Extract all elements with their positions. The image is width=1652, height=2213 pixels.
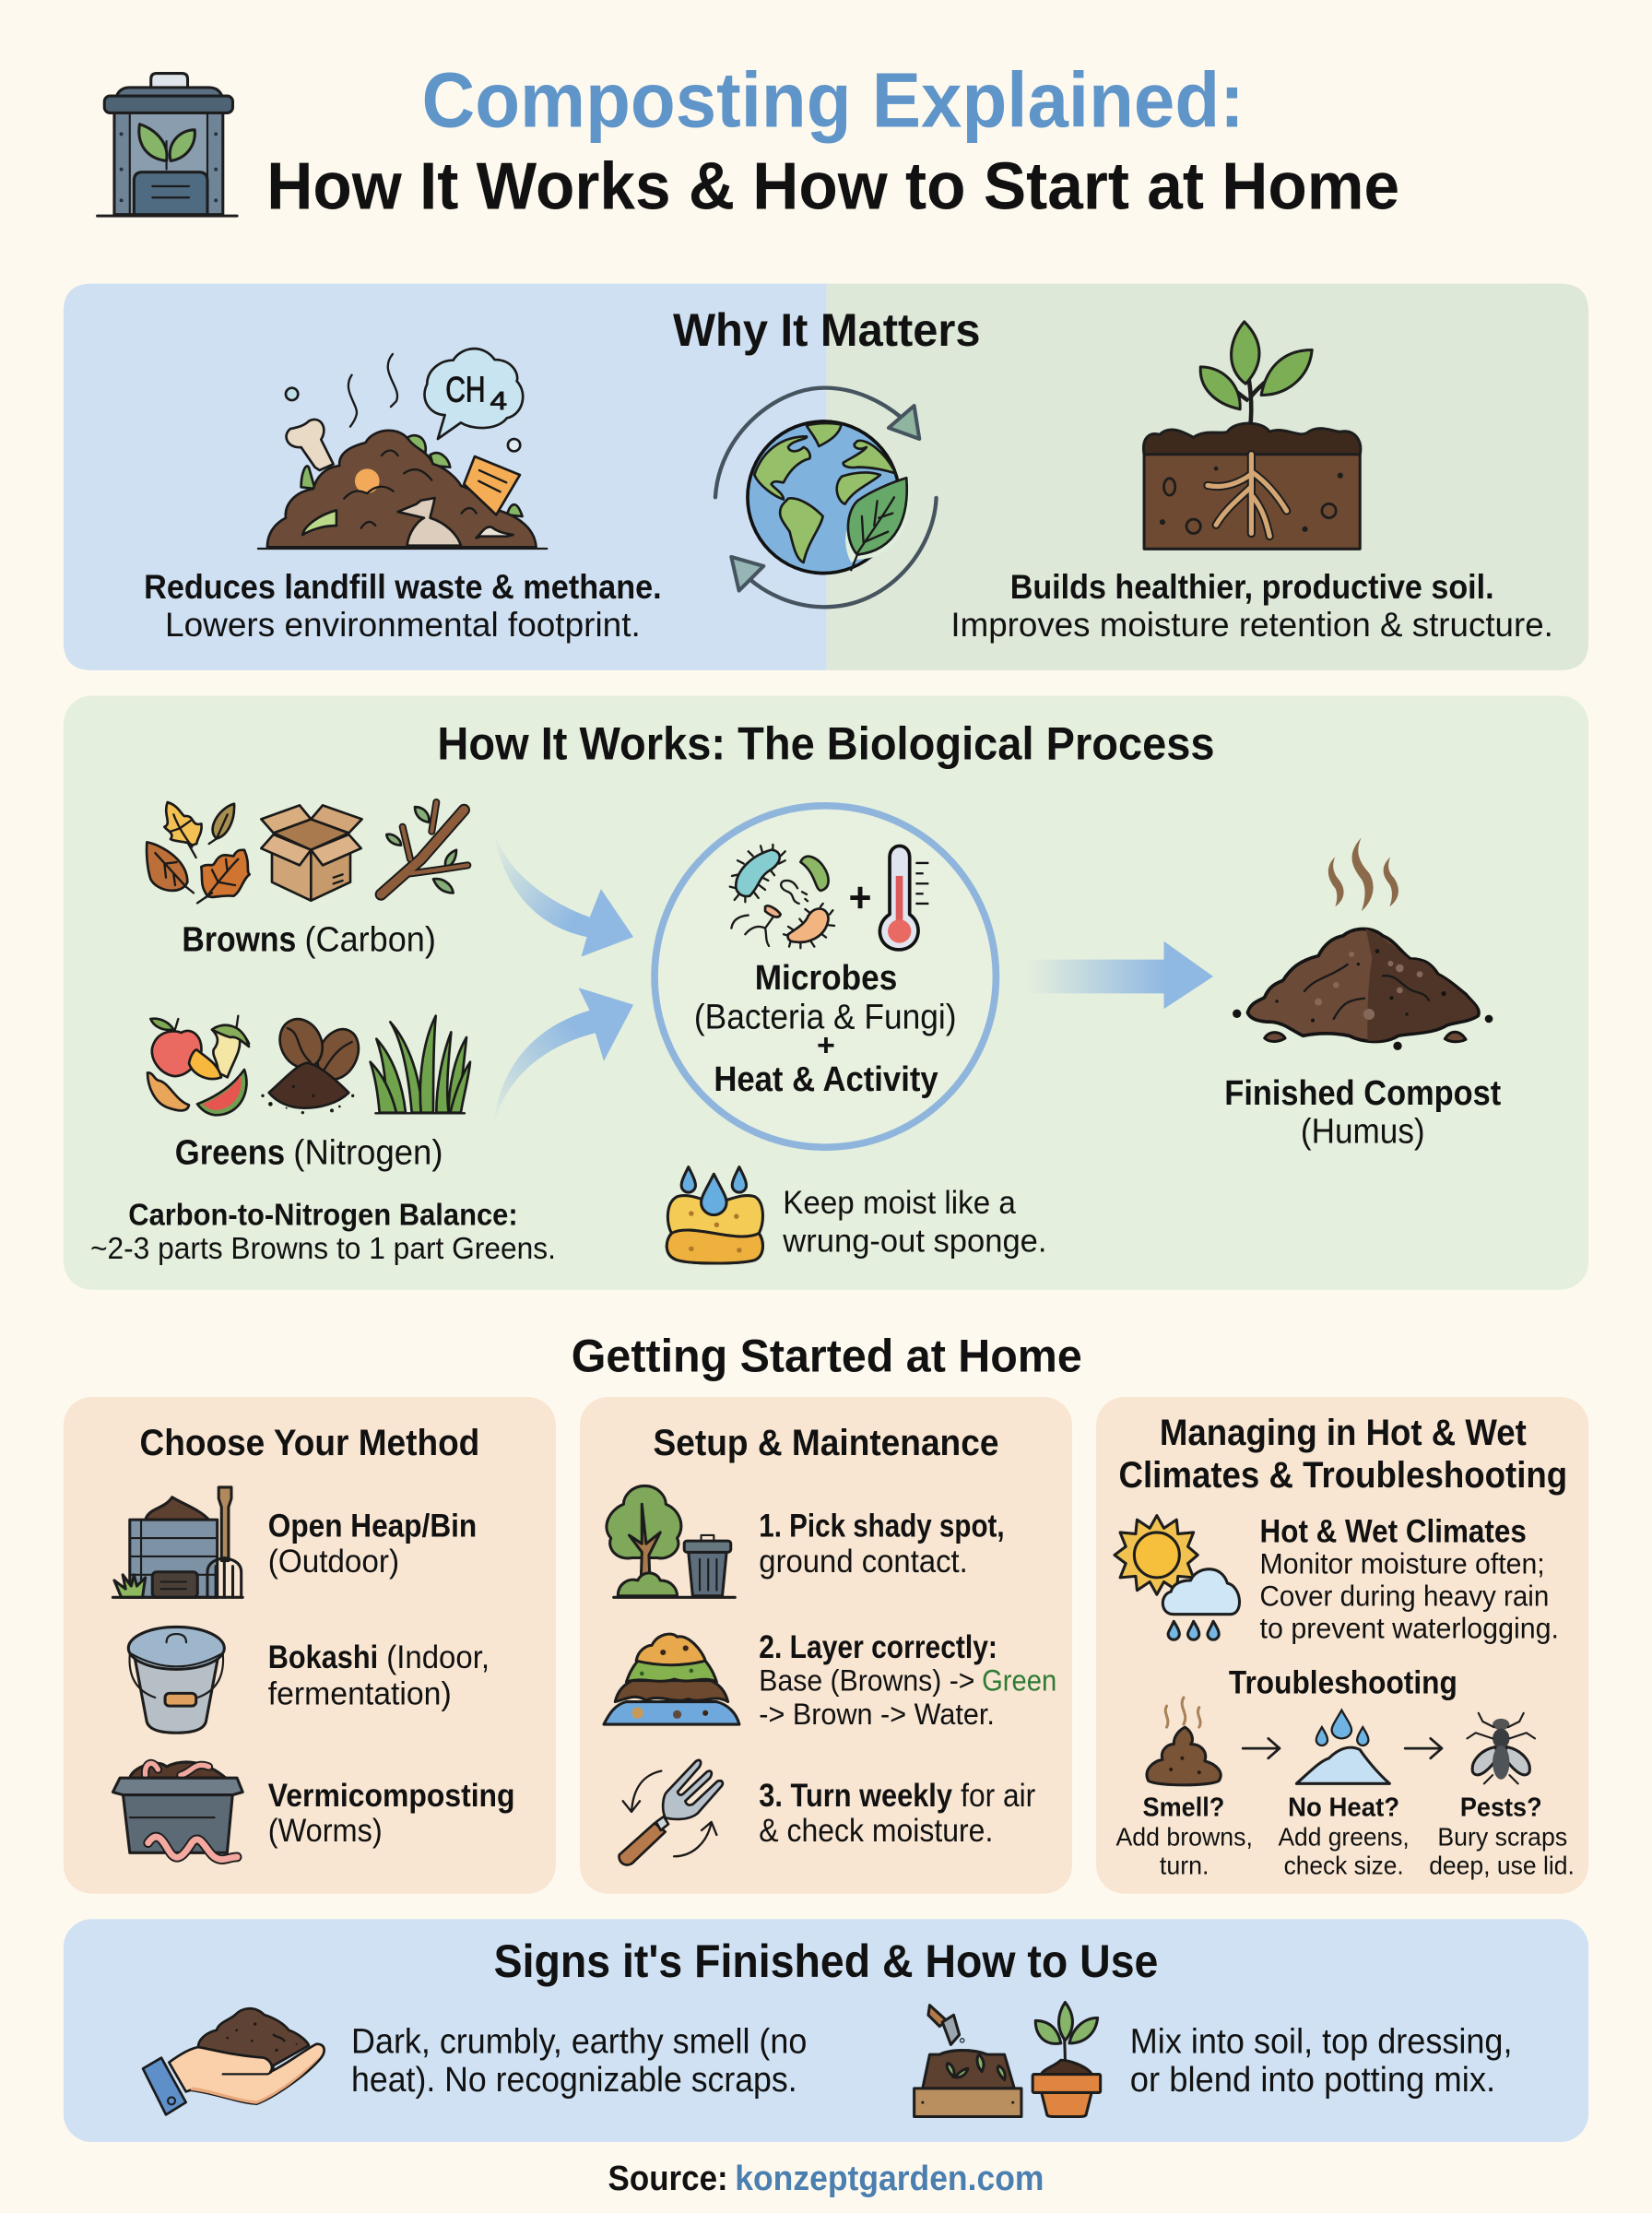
icon: browns, cardboard box	[261, 805, 362, 901]
text: no heat fix: check size.	[1284, 1851, 1404, 1879]
source credit	[608, 2159, 1044, 2198]
text: open heap	[268, 1509, 477, 1580]
text: finished signs	[351, 2022, 807, 2100]
text: greens label: (Nitrogen)	[293, 1133, 443, 1173]
text: open heap: Open Heap/Bin	[268, 1509, 477, 1544]
text: heat and activity: Heat & Activity	[714, 1059, 938, 1099]
text: landfill benefit: Reduces landfill waste & methane.	[144, 568, 662, 606]
text: browns label: Browns	[182, 919, 296, 959]
icon: smelly pile	[1147, 1698, 1221, 1785]
text: carbon-to-nitrogen balance	[90, 1198, 556, 1266]
panel: why it matters	[64, 284, 1588, 670]
icon: hand holding compost	[143, 2008, 324, 2114]
panel: choose your method	[64, 1397, 556, 1894]
heading: why it matters: Why It Matters	[673, 303, 981, 356]
arrow: smell to no heat	[1243, 1738, 1280, 1758]
heading: managing in hot and wet: Managing in Hot & Wet	[1160, 1413, 1527, 1453]
arrow: browns to microbes	[492, 827, 633, 957]
icon: worm bin	[112, 1762, 242, 1860]
text: finished signs: heat). No recognizable scraps.	[351, 2060, 797, 2100]
text: browns label	[182, 919, 436, 959]
icon: compost layers	[604, 1634, 739, 1724]
text: bokashi: Bokashi	[268, 1639, 378, 1675]
text: hot and wet climates: to prevent waterlogging.	[1260, 1613, 1559, 1645]
text: finished compost	[1224, 1073, 1501, 1152]
heading: getting started at home: Getting Started at Home	[572, 1329, 1082, 1381]
text: greens label	[175, 1133, 443, 1173]
text: step 1	[759, 1509, 1005, 1580]
icon: landfill with methane: CH	[445, 370, 486, 410]
text: finished compost: (Humus)	[1301, 1112, 1425, 1152]
icon: microbes	[730, 845, 834, 948]
icon: sun and rain cloud	[1115, 1516, 1239, 1639]
text: smell fix: Smell?	[1143, 1793, 1224, 1823]
text: pests fix	[1429, 1793, 1575, 1879]
icon: fly	[1468, 1713, 1535, 1783]
arrow: process to finished compost	[1027, 941, 1213, 1009]
text: step 1: 1. Pick shady spot,	[759, 1509, 1005, 1544]
text: hot and wet climates: Cover during heavy rain	[1260, 1580, 1549, 1613]
panel: how it works	[64, 695, 1588, 1290]
text: hot and wet climates	[1260, 1514, 1559, 1645]
text: step 2: 2. Layer correctly:	[759, 1629, 997, 1665]
text: no heat fix: No Heat?	[1288, 1793, 1399, 1823]
text: smell fix: turn.	[1160, 1851, 1209, 1879]
text: hot and wet climates: Hot & Wet Climates	[1260, 1514, 1527, 1550]
text: bokashi: (Indoor,	[386, 1639, 490, 1675]
text: step 3: & check moisture.	[759, 1813, 993, 1849]
text: soil benefit	[950, 568, 1553, 644]
text: smell fix	[1115, 1793, 1253, 1879]
icon: browns, leaves	[147, 802, 250, 903]
text: step 1: ground contact.	[759, 1544, 968, 1580]
icon: browns, twig	[381, 802, 467, 894]
text: bokashi	[268, 1639, 490, 1712]
text: vermicomposting	[268, 1778, 515, 1849]
heading: troubleshooting: Troubleshooting	[1229, 1664, 1457, 1700]
text: landfill benefit	[144, 568, 662, 644]
icon: greens, coffee grounds	[261, 1012, 366, 1114]
heading: setup and maintenance: Setup & Maintenance	[654, 1423, 998, 1463]
plus sign	[850, 887, 870, 908]
icon: tree and bin	[607, 1485, 735, 1597]
icon: garden fork with turning arrows	[620, 1760, 723, 1864]
text: bacteria and fungi: (Bacteria & Fungi)	[694, 998, 957, 1037]
icon: bokashi bucket	[128, 1627, 224, 1733]
icon: landfill with methane: 4	[490, 386, 507, 415]
text: keep moist	[782, 1185, 1046, 1259]
text: pests fix: Bury scraps	[1437, 1823, 1567, 1852]
text: step 2: Base (Browns) ->	[759, 1663, 974, 1697]
title line 2: How It Works & How to Start at Home	[266, 149, 1399, 223]
text: vermicomposting: Vermicomposting	[268, 1778, 515, 1814]
panel: signs it's finished	[64, 1919, 1588, 2142]
text: finished compost: Finished Compost	[1224, 1073, 1501, 1113]
icon: open heap bin	[112, 1487, 242, 1597]
source credit: Source:	[608, 2159, 728, 2198]
panel: setup and maintenance	[580, 1397, 1072, 1894]
heading: how it works: How It Works: The Biological Process	[437, 716, 1215, 769]
text: step 2: -> Brown -> Water.	[759, 1698, 995, 1731]
heading: managing in hot and wet	[1119, 1413, 1567, 1496]
text: bokashi: fermentation)	[268, 1676, 452, 1712]
icon: dry pile and water drops	[1296, 1710, 1389, 1783]
heading: choose your method: Choose Your Method	[140, 1423, 479, 1463]
icon: thermometer	[879, 846, 928, 950]
panel: managing hot and wet climates	[1096, 1397, 1588, 1894]
icon: landfill with methane	[258, 349, 547, 549]
icon: raised bed and potted plant	[914, 2003, 1101, 2116]
text: carbon-to-nitrogen balance: Carbon-to-Nitrogen Balance:	[128, 1198, 518, 1232]
text: pests fix: Pests?	[1460, 1793, 1542, 1823]
source credit: konzeptgarden.com	[735, 2159, 1044, 2198]
icon: wet sponge	[667, 1167, 762, 1263]
text: landfill benefit: Lowers environmental footprint.	[165, 606, 641, 644]
icon: plant in soil	[1143, 322, 1361, 549]
arrow: greens to microbes	[492, 988, 633, 1129]
text: no heat fix: Add greens,	[1278, 1823, 1410, 1852]
icon: compost bin	[98, 74, 237, 216]
text: step 3: for air	[961, 1778, 1035, 1814]
text: how to use	[1130, 2022, 1512, 2100]
text: how to use: or blend into potting mix.	[1130, 2060, 1495, 2100]
icon: greens, food scraps	[148, 1016, 249, 1115]
text: plus: +	[817, 1029, 835, 1063]
arrow: no heat to pests	[1405, 1738, 1442, 1758]
title line 1: Composting Explained:	[422, 57, 1245, 144]
text: soil benefit: Improves moisture retention & structure.	[950, 606, 1553, 644]
text: greens label: Greens	[175, 1133, 285, 1173]
text: step 3: 3. Turn weekly	[759, 1778, 952, 1814]
text: pests fix: deep, use lid.	[1429, 1851, 1575, 1879]
text: hot and wet climates: Monitor moisture often;	[1260, 1547, 1545, 1580]
text: microbes: Microbes	[755, 958, 897, 998]
icon: greens, grass	[371, 1016, 470, 1113]
text: smell fix: Add browns,	[1115, 1823, 1253, 1852]
process circle: microbes and heat	[655, 806, 996, 1147]
text: finished signs: Dark, crumbly, earthy smell (no	[351, 2022, 807, 2062]
text: carbon-to-nitrogen balance: ~2-3 parts Browns to 1 part Greens.	[90, 1232, 556, 1266]
text: no heat fix	[1278, 1793, 1410, 1879]
heading: signs it's finished: Signs it's Finished & How to Use	[494, 1935, 1158, 1987]
icon: finished compost pile	[1233, 837, 1493, 1050]
text: how to use: Mix into soil, top dressing,	[1130, 2022, 1512, 2062]
text: step 2: Green	[982, 1663, 1056, 1697]
text: keep moist: wrung-out sponge.	[782, 1223, 1046, 1259]
text: step 2	[759, 1629, 1056, 1731]
text: keep moist: Keep moist like a	[783, 1185, 1016, 1221]
text: vermicomposting: (Worms)	[268, 1813, 383, 1849]
title block	[98, 57, 1399, 223]
text: open heap: (Outdoor)	[268, 1544, 399, 1580]
text: step 3	[759, 1778, 1035, 1849]
text: browns label: (Carbon)	[305, 919, 436, 959]
heading: managing in hot and wet: Climates & Troubleshooting	[1119, 1455, 1567, 1496]
text: soil benefit: Builds healthier, productive soil.	[1010, 568, 1494, 606]
icon: globe with recycling arrows	[715, 388, 937, 607]
